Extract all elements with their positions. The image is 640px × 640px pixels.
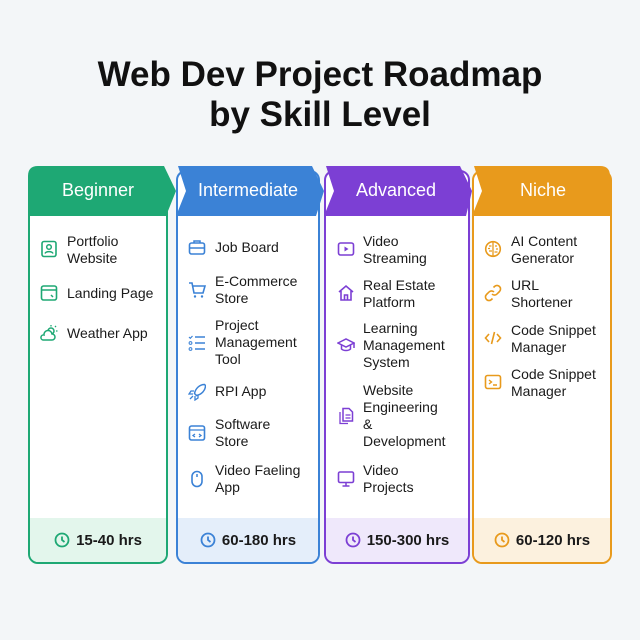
item: code snippet 1: Code Snippet: [511, 322, 596, 338]
icon: code: [484, 332, 502, 344]
item: video streaming: Video: [363, 233, 399, 249]
item: project management: Project: [215, 317, 259, 333]
footer: niche hours: [474, 518, 610, 562]
icon: terminal: [484, 374, 502, 390]
item: video streaming: [363, 233, 427, 266]
footer: intermediate hours: 60-180 hrs: [222, 532, 296, 548]
item: code snippet 2: [511, 366, 596, 399]
item: software store: [215, 416, 270, 449]
item: real estate: [363, 277, 435, 310]
icon: brain: [484, 240, 502, 258]
item: real estate: Platform: [363, 294, 415, 310]
icon: list: [188, 336, 205, 351]
footer: beginner hours: 15-40 hrs: [76, 532, 142, 548]
item: ai content: Generator: [511, 250, 574, 266]
icon: cart: [189, 282, 206, 298]
item: video projects: Video: [363, 462, 399, 478]
item: landing: Landing Page: [67, 285, 153, 301]
heading: advanced: Advanced: [356, 180, 436, 200]
title: Web Dev Project Roadmap: [98, 55, 542, 94]
footer: intermediate hours: [178, 518, 318, 562]
heading: beginner: Beginner: [62, 180, 134, 200]
icon: link: [484, 284, 502, 302]
footer: beginner hours: [30, 518, 166, 562]
heading: intermediate: Intermediate: [198, 180, 298, 200]
item: url shortener: [511, 277, 572, 310]
item: ecommerce: Store: [215, 290, 248, 306]
item: portfolio: Website: [67, 250, 117, 266]
item: weather: Weather App: [67, 325, 148, 341]
item: lms: Management: [363, 337, 445, 353]
item: real estate: Real Estate: [363, 277, 435, 293]
item: lms: [363, 320, 445, 370]
item: ecommerce: [215, 273, 297, 306]
item: video app: App: [215, 479, 240, 495]
item: ai content: AI Content: [511, 233, 577, 249]
item: rpi app: RPI App: [215, 383, 266, 399]
item: job board: Job Board: [215, 239, 279, 255]
panel: beginner: [28, 170, 168, 564]
footer: niche hours: 60-120 hrs: [516, 532, 590, 548]
item: url shortener: Shortener: [511, 294, 572, 310]
panel: niche: [472, 170, 612, 564]
item: software store: Software: [215, 416, 270, 432]
heading: niche: Niche: [520, 180, 566, 200]
item: code snippet 2: Manager: [511, 383, 566, 399]
footer: advanced hours: 150-300 hrs: [367, 532, 449, 548]
item: video streaming: Streaming: [363, 250, 427, 266]
item: website engineering: [363, 382, 446, 449]
item: website engineering: Engineering: [363, 399, 438, 415]
item: portfolio: Portfolio: [67, 233, 118, 249]
item: project management: [215, 317, 297, 367]
panel: intermediate: [176, 170, 320, 564]
item: software store: Store: [215, 433, 248, 449]
item: website engineering: Development: [363, 433, 446, 449]
icon: weather: [40, 325, 58, 341]
item: project management: Tool: [215, 351, 241, 367]
item: url shortener: URL: [511, 277, 539, 293]
item: video projects: Projects: [363, 479, 414, 495]
icon: documents: [339, 408, 354, 424]
item: website engineering: Website: [363, 382, 413, 398]
icon: house: [338, 285, 354, 301]
title: [98, 55, 542, 134]
icon: job board: [188, 240, 206, 255]
footer: advanced hours: [326, 518, 468, 562]
icon: rocket: [188, 384, 206, 401]
item: video projects: [363, 462, 414, 495]
icon: mouse: [191, 470, 203, 488]
icon: grad cap: [337, 338, 355, 352]
item: video app: Video Faeling: [215, 462, 300, 478]
item: ecommerce: E-Commerce: [215, 273, 297, 289]
item: code snippet 2: Code Snippet: [511, 366, 596, 382]
title: by Skill Level: [209, 95, 431, 134]
panel: advanced: [324, 170, 470, 564]
icon: portfolio: [41, 240, 57, 258]
item: video app: [215, 462, 300, 495]
icon: software store: [188, 425, 206, 441]
item: code snippet 1: [511, 322, 596, 355]
item: lms: Learning: [363, 320, 418, 336]
item: website engineering: &: [363, 416, 372, 432]
item: ai content: [511, 233, 578, 266]
item: project management: Management: [215, 334, 297, 350]
icon: monitor: [338, 471, 354, 487]
icon: play: [338, 242, 354, 256]
icon: landing: [40, 285, 58, 301]
item: lms: System: [363, 354, 410, 370]
item: code snippet 1: Manager: [511, 339, 566, 355]
item: portfolio: [67, 233, 118, 266]
